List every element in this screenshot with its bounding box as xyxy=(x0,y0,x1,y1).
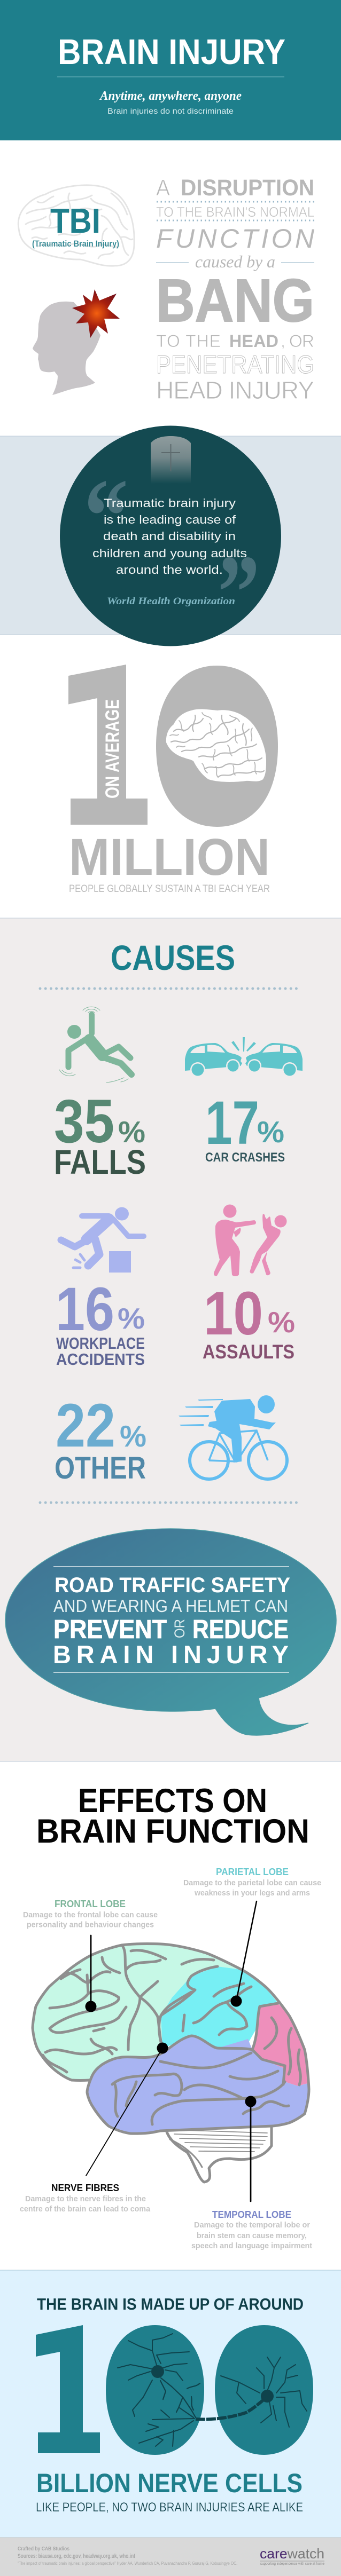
panel: effects on brain function xyxy=(0,1761,341,2250)
word: DISRUPTION: DISRUPTION xyxy=(181,175,314,201)
line: billion nerve cells: BILLION NERVE CELLS xyxy=(36,2468,303,2498)
label: parietal lobe: Damage to the parietal lobe can cause xyxy=(183,1879,321,1887)
icon: car crash xyxy=(185,1037,303,1077)
word: FUNCTION: FUNCTION xyxy=(156,224,315,254)
leader: nerve fibres xyxy=(86,2042,168,2176)
icon: assault xyxy=(214,1204,286,1276)
stat: 10% assaults: % xyxy=(268,1306,295,1339)
panel: footer xyxy=(0,2538,341,2576)
heading: causes: CAUSES xyxy=(111,938,235,977)
heading: TBI: TBI xyxy=(50,201,100,240)
sources: Sources: biausa.org, cdc.gov, headway.org.uk, who.int xyxy=(18,2553,135,2559)
label: parietal lobe: weakness in your legs and arms xyxy=(194,1889,310,1898)
label: frontal lobe: personality and behaviour changes xyxy=(27,1921,154,1929)
label: temporal lobe: speech and language impairment xyxy=(191,2242,312,2250)
text: disruption statement: HEAD xyxy=(229,331,278,351)
logo: carewatch: carewatch xyxy=(260,2546,324,2562)
lobe: temporal xyxy=(87,2036,309,2134)
label: temporal lobe xyxy=(191,2209,312,2250)
lobe: frontal xyxy=(33,1944,242,2080)
heading: effects on brain function: EFFECTS ON xyxy=(78,1782,267,1820)
stat: 17% car crashes: % xyxy=(257,1115,284,1149)
stat: 22% other: % xyxy=(120,1419,146,1453)
line: and wearing a helmet can: AND WEARING A HELMET CAN xyxy=(53,1597,288,1616)
icon: head silhouette xyxy=(33,302,100,395)
word: PENETRATING: PENETRATING xyxy=(156,350,314,378)
brain diagram xyxy=(33,1901,309,2201)
stat: 22% other: OTHER xyxy=(55,1451,146,1485)
caption: people globally: PEOPLE GLOBALLY SUSTAIN A TBI EACH YEAR xyxy=(69,883,270,895)
credit: Crafted by CAB Studios xyxy=(18,2546,69,2552)
stat: 35% falls: 35 xyxy=(54,1087,114,1156)
heading: effects on brain function xyxy=(36,1782,309,1850)
lobe: parietal xyxy=(161,1966,278,2048)
stat: 35% falls: FALLS xyxy=(54,1143,146,1181)
line: road traffic safety: ROAD TRAFFIC SAFETY xyxy=(55,1574,290,1597)
stat: 10% assaults: ASSAULTS xyxy=(203,1341,294,1363)
leader: frontal lobe xyxy=(86,1935,96,2012)
label: parietal lobe xyxy=(183,1867,321,1898)
numeral 0 left xyxy=(106,2325,204,2455)
stat: 35% falls: % xyxy=(118,1115,145,1149)
line: to the brain's normal: TO THE BRAIN'S NORMAL xyxy=(156,204,314,220)
stat: 35% falls xyxy=(54,1087,146,1181)
line: brain injury: BRAIN INJURY xyxy=(53,1640,289,1669)
label: temporal lobe: brain stem can cause memory, xyxy=(197,2232,307,2240)
quote text: death and disability in xyxy=(103,530,236,543)
word: A: A xyxy=(156,175,170,201)
line: reduce: REDUCE xyxy=(192,1615,289,1644)
quote text xyxy=(92,496,247,576)
quote circle xyxy=(60,426,281,646)
icon: brain outline xyxy=(18,185,134,266)
line: head injury: HEAD INJURY xyxy=(156,376,314,404)
icon: falling person xyxy=(59,1007,131,1082)
label: frontal lobe: Damage to the frontal lobe can cause xyxy=(23,1911,158,1919)
label: frontal lobe xyxy=(23,1899,158,1929)
panel: TBI definition xyxy=(18,175,315,404)
tagline: Brain injuries do not discriminate xyxy=(107,107,234,116)
line: to the head, or: TO THE xyxy=(156,331,221,351)
stat: 16% workplace accidents xyxy=(56,1275,145,1369)
label: nerve fibres: NERVE FIBRES xyxy=(51,2183,119,2193)
label: frontal lobe: FRONTAL LOBE xyxy=(55,1899,126,1909)
text: disruption statement: , OR xyxy=(281,331,314,351)
panel: header xyxy=(0,0,341,140)
stat: 22% other: 22 xyxy=(56,1392,115,1460)
citation: "The impact of traumatic brain injuries: a global perspective" Hyder AA, Wunderlich CA, Puvanachandra P, Gururaj G, Kobusingye OC. xyxy=(18,2561,237,2566)
stat: 17% car crashes: 17 xyxy=(205,1089,259,1157)
cerebellum and stem xyxy=(166,2124,272,2182)
label: nerve fibres xyxy=(20,2183,151,2214)
brain sulci xyxy=(33,1944,309,2134)
numeral 0 xyxy=(156,666,278,827)
label: Traumatic Brain Injury: (Traumatic Brain Injury) xyxy=(32,239,119,249)
quote text: around the world. xyxy=(116,563,223,576)
lobe: occipital xyxy=(252,2003,308,2086)
stat: 22% other xyxy=(55,1392,146,1485)
icon: impact star xyxy=(72,289,120,338)
icon: white brain xyxy=(166,709,266,782)
panel: WHO quote band xyxy=(0,426,341,652)
title: BRAIN INJURY xyxy=(58,32,285,72)
stat: 10% assaults xyxy=(203,1279,295,1363)
callout: speech bubble xyxy=(5,1529,336,1735)
label: nerve fibres: Damage to the nerve fibres in the xyxy=(25,2195,146,2203)
quote text: is the leading cause of xyxy=(104,513,236,526)
stat: 17% car crashes: CAR CRASHES xyxy=(205,1150,285,1165)
quote text: Traumatic brain injury xyxy=(104,496,236,510)
numeral 1 xyxy=(36,2325,100,2453)
icon: gravestone xyxy=(151,436,191,484)
quote attribution: World Health Organization xyxy=(107,596,235,607)
icon: neurons xyxy=(118,2334,307,2446)
line: prevent: PREVENT xyxy=(53,1615,167,1644)
line: or: OR xyxy=(172,1619,188,1638)
icon: cyclist xyxy=(179,1395,287,1479)
word: BANG: BANG xyxy=(156,267,314,334)
quote text: children and young adults xyxy=(92,547,247,560)
numeral 0 right xyxy=(215,2325,313,2455)
leader: parietal lobe xyxy=(231,1901,257,2007)
text: disruption statement xyxy=(156,175,315,404)
logo: carewatch: supporting independence with care at home xyxy=(260,2562,324,2566)
opening quote mark: “ xyxy=(84,457,128,575)
stat: 16% workplace accidents: WORKPLACE xyxy=(56,1334,145,1353)
stat: 16% workplace accidents: 16 xyxy=(56,1275,114,1344)
panel: 10 million xyxy=(68,665,278,895)
icon: workplace accident xyxy=(61,1207,144,1273)
word: MILLION: MILLION xyxy=(69,828,270,886)
panel: causes xyxy=(0,918,341,1761)
label: temporal lobe: Damage to the temporal lobe or xyxy=(194,2221,310,2230)
heading: effects on brain function: BRAIN FUNCTION xyxy=(36,1813,309,1850)
label: nerve fibres: centre of the brain can lead to coma xyxy=(20,2205,151,2214)
line: caused by a: caused by a xyxy=(195,252,275,271)
heading: the brain is made up of around: THE BRAIN IS MADE UP OF AROUND xyxy=(37,2295,304,2313)
stat: 10% assaults: 10 xyxy=(204,1279,263,1348)
numeral 1 xyxy=(68,665,148,825)
subtitle: Anytime, anywhere, anyone xyxy=(99,89,242,103)
leader: temporal lobe xyxy=(245,2096,257,2201)
stat: 16% workplace accidents: ACCIDENTS xyxy=(56,1350,145,1369)
label: temporal lobe: TEMPORAL LOBE xyxy=(212,2209,291,2220)
closing quote mark: ” xyxy=(218,534,260,652)
rotated label: on average: ON AVERAGE xyxy=(102,699,123,799)
panel: 100 billion nerve cells xyxy=(0,2270,341,2538)
label: parietal lobe: PARIETAL LOBE xyxy=(216,1867,289,1877)
stat: 16% workplace accidents: % xyxy=(118,1302,145,1335)
